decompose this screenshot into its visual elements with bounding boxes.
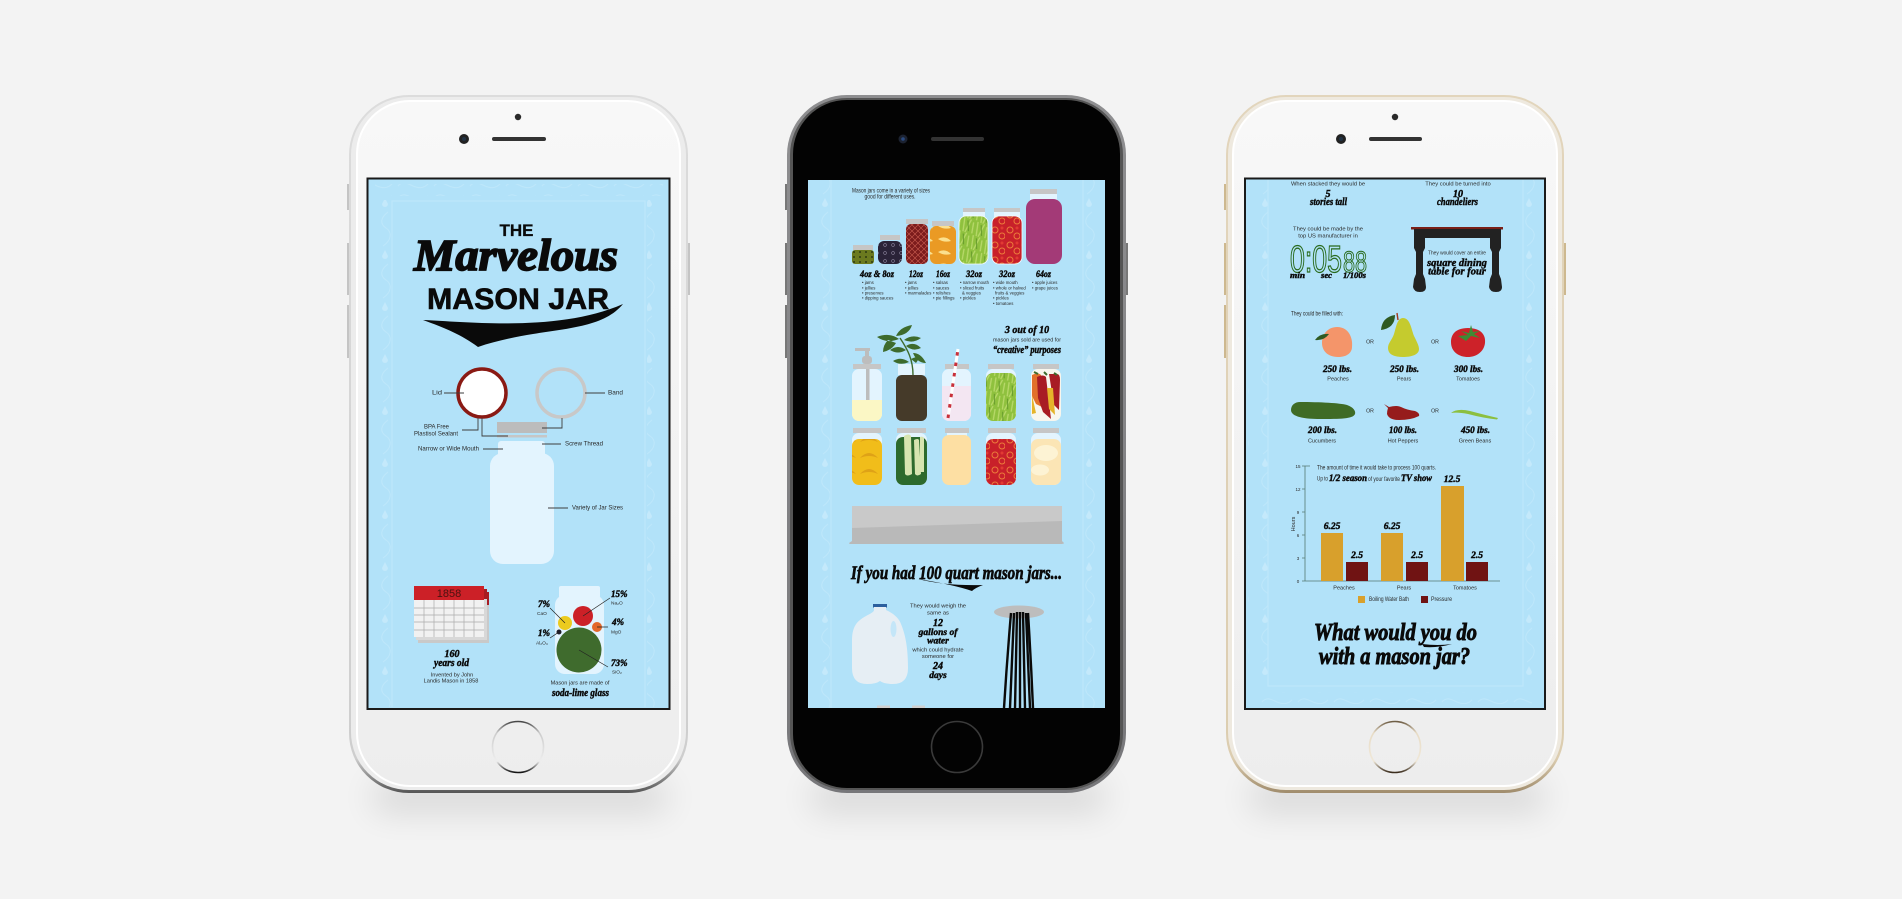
text: 3 out of 10 creative purposes: “creative” purposes xyxy=(993,345,1061,356)
chart caption: Up to xyxy=(1317,476,1328,483)
jar: peppers xyxy=(1031,364,1061,421)
text and clock: manufacturing time: min xyxy=(1290,270,1305,280)
chart: jars by size: • preserves xyxy=(862,291,884,296)
icon: milk jug xyxy=(852,604,908,684)
heading: what would you do with a mason jar: with a mason jar? xyxy=(1319,644,1470,670)
text: 160 years old xyxy=(424,649,478,684)
chart: jars by size: • sauces xyxy=(933,286,949,291)
bar chart: hours to process 100 quarts: 6 xyxy=(1297,533,1300,538)
panel: white phone with title and jar anatomy xyxy=(347,95,690,793)
jar: green beans xyxy=(986,364,1016,421)
panel: gold phone with comparisons and chart xyxy=(1224,95,1566,793)
text and clock: manufacturing time: 88 xyxy=(1343,246,1367,279)
chart: soda-lime glass composition jar: Mason jars are made of xyxy=(551,680,610,686)
text: stories tall: 5 xyxy=(1326,189,1330,200)
title: THE xyxy=(500,221,534,240)
chart: jars by size: • pickles xyxy=(960,296,976,301)
legend: Pressure xyxy=(1431,596,1452,603)
text: chandeliers xyxy=(1425,182,1491,208)
section: fruit and vegetable weights: 250 lbs. xyxy=(1389,365,1419,375)
chart: soda-lime glass composition jar: soda-lime glass xyxy=(551,688,609,699)
section: fruit and vegetable weights: Hot Peppers xyxy=(1388,438,1419,444)
text and clock: manufacturing time: 1/100s xyxy=(1343,270,1367,280)
text: 160 years old: Invented by John xyxy=(431,672,473,678)
jar: cream xyxy=(942,428,971,485)
title xyxy=(413,221,623,347)
section: fruit and vegetable weights: OR xyxy=(1366,408,1374,414)
heading: what would you do with a mason jar: What would you do xyxy=(1314,620,1477,646)
section: fruit and vegetable weights: Pears xyxy=(1397,376,1411,382)
chart: soda-lime glass composition jar: 7% xyxy=(538,599,550,609)
chart: jars by size: • pickles xyxy=(993,296,1009,301)
diagram: jar anatomy: Variety of Jar Sizes xyxy=(572,505,623,512)
section: fruit and vegetable weights: 100 lbs. xyxy=(1389,426,1417,436)
icon: dining table xyxy=(1411,227,1503,292)
icon: dining table: They would cover an entire xyxy=(1428,251,1486,257)
chart: jars by size: & veggies xyxy=(962,291,981,296)
chart: jars by size: • whole or halved xyxy=(993,286,1026,291)
chart: jars by size: • jams xyxy=(862,280,874,285)
diagram: jar anatomy xyxy=(414,369,623,564)
jar: pickles xyxy=(896,428,927,485)
jar: soap dispenser xyxy=(852,348,882,421)
text: 160 years old: 160 xyxy=(444,649,460,660)
section: fruit and vegetable weights: Tomatoes xyxy=(1456,376,1480,382)
diagram: jar anatomy: Band xyxy=(608,390,623,397)
chart: soda-lime glass composition jar: 73% xyxy=(611,658,628,668)
illustration: creative jar grid xyxy=(852,325,1061,485)
section: fruit and vegetable weights: OR xyxy=(1431,408,1439,414)
chart: soda-lime glass composition jar: SiO₂ xyxy=(612,669,622,675)
text: stories tall xyxy=(1291,182,1365,208)
text: stories tall: stories tall xyxy=(1309,197,1347,208)
panel: black phone with jar sizes and uses xyxy=(785,95,1128,793)
text: 12 gallons, 24 days: gallons of xyxy=(918,628,958,638)
bar chart: hours to process 100 quarts xyxy=(1291,464,1500,603)
text and clock: manufacturing time: 0:05 xyxy=(1290,239,1342,281)
icon: green bean xyxy=(1451,410,1498,420)
icon: cucumber xyxy=(1291,402,1355,419)
jar: smoothie with straw xyxy=(942,349,971,421)
section: fruit and vegetable weights: OR xyxy=(1431,339,1439,345)
text: 12 gallons, 24 days: same as xyxy=(927,611,949,617)
chart: jars by size: • grape juices xyxy=(1032,286,1058,291)
chart: jars by size: 64oz xyxy=(1036,270,1051,280)
bar chart: hours to process 100 quarts: 3 xyxy=(1297,556,1300,561)
text: 3 out of 10 creative purposes: mason jars sold are used for xyxy=(993,337,1061,343)
icon: calendar 1858 xyxy=(414,586,489,643)
icon: calendar 1858: 1858 xyxy=(437,588,461,600)
bar chart: hours to process 100 quarts: 6.25 xyxy=(1384,522,1401,532)
bar chart: hours to process 100 quarts: 12.5 xyxy=(1444,475,1461,485)
text: chandeliers: 10 xyxy=(1453,189,1463,200)
bar chart: hours to process 100 quarts: 2.5 xyxy=(1350,551,1363,561)
chart: jars by size xyxy=(852,189,1062,306)
chart: jars by size: • narrow mouth xyxy=(960,280,990,285)
text: 3 out of 10 creative purposes: 3 out of 10 xyxy=(1004,325,1049,336)
bar chart: hours to process 100 quarts: 2.5 xyxy=(1410,551,1423,561)
text and clock: manufacturing time: top US manufacturer in xyxy=(1298,234,1358,240)
chart: jars by size: • jellies xyxy=(862,286,875,291)
section: fruit and vegetable weights: Peaches xyxy=(1327,376,1349,382)
icon: tomato xyxy=(1451,325,1485,357)
text: 12 gallons, 24 days: 12 xyxy=(933,618,943,629)
chart: jars by size: • jellies xyxy=(905,286,918,291)
jar: tomatoes xyxy=(986,428,1016,485)
text and clock: manufacturing time: sec xyxy=(1320,270,1332,280)
chart caption: TV show xyxy=(1401,474,1433,484)
illustration: chandelier xyxy=(994,606,1044,708)
chart: jars by size: • relishes xyxy=(933,291,951,296)
section: fruit and vegetable weights: 450 lbs. xyxy=(1460,426,1490,436)
icon: dining table: table for four xyxy=(1428,266,1487,278)
heading: if you had 100 quart mason jars: If you had 100 quart mason jars... xyxy=(850,563,1062,584)
text: intro xyxy=(852,188,930,201)
text: 12 gallons, 24 days: They would weigh the xyxy=(910,604,966,610)
bar chart: hours to process 100 quarts: 2.5 xyxy=(1470,551,1483,561)
text: 160 years old: years old xyxy=(433,658,470,669)
text and clock: manufacturing time: They could be made by the xyxy=(1293,227,1363,233)
heading: what would you do with a mason jar xyxy=(1314,620,1477,670)
diagram: jar anatomy: Screw Thread xyxy=(565,441,603,448)
chart: jars by size: • wide mouth xyxy=(993,280,1018,285)
section: fruit and vegetable weights: Green Beans xyxy=(1459,438,1491,444)
text: 160 years old: Landis Mason in 1858 xyxy=(424,678,478,684)
text: 12 gallons, 24 days: days xyxy=(929,671,947,681)
diagram: jar anatomy: Lid xyxy=(432,390,443,397)
chart: jars by size: • salsas xyxy=(933,280,948,285)
chart caption: 1/2 season xyxy=(1329,474,1367,484)
bar chart: hours to process 100 quarts: 6.25 xyxy=(1324,522,1341,532)
phone shadows xyxy=(375,784,1542,810)
chart: soda-lime glass composition jar xyxy=(536,586,628,699)
chart: jars by size: 32oz xyxy=(998,270,1015,280)
title: Marvelous xyxy=(413,231,618,280)
chart: soda-lime glass composition jar: 15% xyxy=(611,589,628,599)
legend: Boiling Water Bath xyxy=(1369,596,1409,603)
heading: if you had 100 quart mason jars xyxy=(850,563,1062,591)
chart: jars by size: 32oz xyxy=(965,270,982,280)
text: 12 gallons, 24 days xyxy=(910,604,966,681)
bar chart: hours to process 100 quarts: Hours xyxy=(1291,516,1297,531)
chart caption: The amount of time it would take to process 100 quarts. xyxy=(1317,465,1436,472)
chart: soda-lime glass composition jar: 1% xyxy=(538,628,550,638)
bar chart: hours to process 100 quarts: 12 xyxy=(1295,487,1301,492)
jar: peaches xyxy=(852,428,882,485)
chart: soda-lime glass composition jar: Na₂O xyxy=(611,600,623,606)
chart: soda-lime glass composition jar: MgO xyxy=(611,629,622,635)
section: fruit and vegetable weights: OR xyxy=(1366,339,1374,345)
chart: jars by size: 16oz xyxy=(936,270,950,280)
chart: jars by size: • pie fillings xyxy=(933,296,955,301)
chart: jars by size: • marmalades xyxy=(905,291,931,296)
diagram: jar anatomy: Plastisol Sealant xyxy=(414,431,458,438)
jar: plant xyxy=(877,325,927,421)
legend xyxy=(1358,596,1452,603)
text: 3 out of 10 creative purposes xyxy=(993,325,1061,356)
bar chart: hours to process 100 quarts: Peaches xyxy=(1333,585,1355,591)
bar chart: hours to process 100 quarts: 9 xyxy=(1297,510,1300,515)
icon: pear xyxy=(1381,313,1419,357)
jar: pale fruit xyxy=(1031,428,1061,485)
text: intro: good for different uses. xyxy=(864,194,916,201)
icon: dining table: square dining xyxy=(1426,258,1487,269)
section: fruit and vegetable weights: 250 lbs. xyxy=(1322,365,1352,375)
text: chandeliers: chandeliers xyxy=(1437,197,1478,208)
icon: hot pepper xyxy=(1384,404,1419,420)
title: MASON JAR xyxy=(427,283,609,316)
chart: soda-lime glass composition jar: CaO xyxy=(537,611,547,617)
text: 12 gallons, 24 days: which could hydrate xyxy=(911,648,964,654)
text: 12 gallons, 24 days: water xyxy=(927,636,949,646)
chart: jars by size: • apple juices xyxy=(1032,280,1057,285)
chart: soda-lime glass composition jar: Al₂O₃ xyxy=(536,640,548,646)
text: chandeliers: They could be turned into xyxy=(1425,182,1491,188)
chart: jars by size: • jams xyxy=(905,280,917,285)
section: fruit and vegetable weights: 300 lbs. xyxy=(1453,365,1483,375)
chart caption: of your favorite xyxy=(1368,476,1400,483)
section: fruit and vegetable weights: 200 lbs. xyxy=(1307,426,1337,436)
section: fruit and vegetable weights xyxy=(1291,311,1498,444)
icon: peach xyxy=(1315,327,1352,357)
chart: jars by size: • dipping sauces xyxy=(862,296,893,301)
section: fruit and vegetable weights: They could be filled with: xyxy=(1291,311,1343,318)
text: 12 gallons, 24 days: 24 xyxy=(932,661,943,672)
bar chart: hours to process 100 quarts: Tomatoes xyxy=(1453,585,1477,591)
diagram: jar anatomy: Narrow or Wide Mouth xyxy=(418,446,479,453)
chart: jars by size: 4oz & 8oz xyxy=(859,270,894,280)
illustration: grey shelf xyxy=(849,506,1064,544)
text: 12 gallons, 24 days: someone for xyxy=(922,654,954,660)
chart: jars by size: • sliced fruits xyxy=(960,286,984,291)
bar chart: hours to process 100 quarts: Pears xyxy=(1397,585,1411,591)
bar chart: hours to process 100 quarts: 0 xyxy=(1297,579,1300,584)
section: fruit and vegetable weights: Cucumbers xyxy=(1308,438,1336,444)
text: intro: Mason jars come in a variety of sizes xyxy=(852,188,930,195)
diagram: jar anatomy: BPA Free xyxy=(424,424,449,431)
chart caption xyxy=(1317,465,1436,484)
chart: jars by size: 12oz xyxy=(909,270,923,280)
text: stories tall: When stacked they would be xyxy=(1291,182,1365,188)
chart: jars by size: fruits & veggies xyxy=(995,291,1024,296)
illustration: next jug tops xyxy=(877,706,925,708)
chart: soda-lime glass composition jar: 4% xyxy=(611,617,624,627)
bar chart: hours to process 100 quarts: 15 xyxy=(1295,464,1301,469)
chart: jars by size: • tomatoes xyxy=(993,301,1013,306)
